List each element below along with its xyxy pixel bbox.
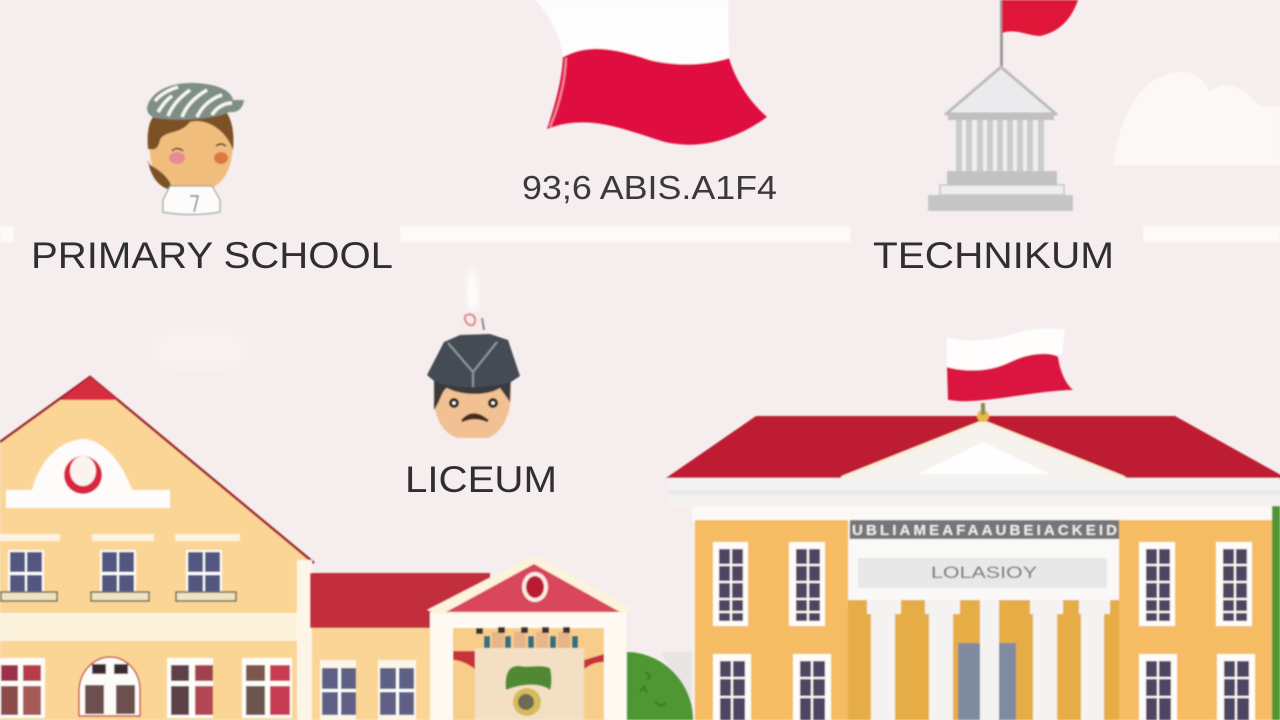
divider band: [0, 226, 1280, 242]
main gable: [0, 377, 314, 720]
icon: technikum building: [928, 0, 1078, 211]
icon: primary school child: [147, 83, 244, 215]
icon: rooftop flag: [947, 329, 1073, 401]
background cloud: [1113, 72, 1280, 165]
icon: liceum student: [427, 265, 520, 438]
upper windows: [1, 550, 236, 601]
walls: [695, 520, 848, 720]
heading: primary school: PRIMARY SCHOOL: [31, 235, 393, 276]
cornice: [668, 478, 1280, 506]
door: [958, 643, 1016, 720]
heading: liceum: LICEUM: [405, 459, 557, 500]
garbled date caption: 93;6 ABIS.A1F4: [522, 169, 777, 206]
icon: large Polish flag: [535, 0, 767, 145]
ground floor windows: [0, 657, 292, 718]
heading: technikum: TECHNIKUM: [873, 235, 1114, 276]
emblem: [6, 439, 170, 508]
shrub: [627, 652, 693, 720]
portico: [430, 612, 626, 720]
right college building: UBLIAMEAFAAUBEIACKEID: [852, 522, 1117, 539]
roof: [666, 416, 1280, 480]
sign text: LOLASIOY: [931, 563, 1037, 582]
windows lower: [713, 654, 1255, 720]
right college building: [666, 403, 1280, 720]
cornices: [0, 534, 240, 541]
inscription: [850, 520, 1119, 539]
columns: [867, 600, 1110, 720]
windows upper: [713, 542, 1252, 626]
wing: [312, 628, 442, 720]
left school building: [0, 377, 632, 720]
band: [0, 613, 300, 641]
faint background cloud: [150, 332, 250, 368]
